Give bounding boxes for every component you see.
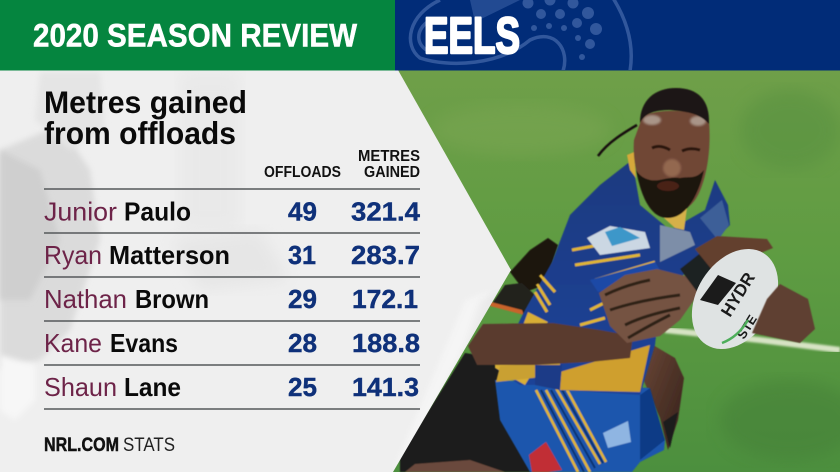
braid <box>598 125 637 156</box>
row: Ryan Matterson: Ryan <box>44 240 102 270</box>
tackling arm <box>468 323 633 365</box>
source: NRL.COM STATS: NRL.COM <box>44 435 119 456</box>
tattooed arm <box>599 269 699 343</box>
row: Junior Paulo <box>44 196 421 226</box>
heading: metres gained from offloads: Metres gained <box>44 84 247 120</box>
header: green title bar <box>0 0 396 70</box>
jersey light shoulder <box>700 200 729 240</box>
panel: stats background <box>0 70 511 472</box>
row: Kane Evans: Kane <box>44 328 102 358</box>
row: Nathan Brown: 172.1 <box>352 286 418 314</box>
photo: rugby league ball: HYDR <box>717 269 759 320</box>
row: Kane Evans <box>44 328 420 358</box>
row: Shaun Lane: 141.3 <box>352 374 419 402</box>
row: Ryan Matterson: 31 <box>288 242 316 270</box>
row: Ryan Matterson: Matterson <box>109 240 230 270</box>
photo: grass field background <box>380 70 840 472</box>
tackler body <box>400 353 532 472</box>
table column headers: GAINED <box>364 164 420 181</box>
jersey yellow stripes <box>535 243 655 325</box>
heading: metres gained from offloads: from offloads <box>44 115 236 151</box>
collar <box>627 152 636 178</box>
row: Shaun Lane: Shaun <box>44 372 117 402</box>
row: Nathan Brown: 29 <box>288 286 317 314</box>
hair <box>640 88 709 124</box>
row: Kane Evans: 188.8 <box>352 330 420 358</box>
row: Kane Evans: 28 <box>288 330 317 358</box>
row: Junior Paulo: Junior <box>44 196 117 226</box>
table column headers: METRES <box>358 148 420 165</box>
row: Kane Evans: Evans <box>110 328 178 358</box>
shorts <box>495 380 665 472</box>
row: Nathan Brown: Nathan <box>44 284 127 314</box>
row: Shaun Lane <box>44 372 419 402</box>
team name: EELS <box>424 7 520 64</box>
wristband <box>680 251 717 293</box>
tackler headgear <box>490 283 535 315</box>
tackler hair <box>510 238 558 292</box>
photo: player left hand <box>752 284 815 343</box>
source: NRL.COM STATS: STATS <box>123 435 175 456</box>
title: 2020 SEASON REVIEW <box>33 18 358 54</box>
table column headers: OFFLOADS <box>264 164 341 181</box>
tackler hand and forearm <box>643 345 684 450</box>
ghost player photo <box>0 72 510 470</box>
head and face <box>634 111 710 218</box>
photo: rugby league ball: STE <box>734 312 760 342</box>
heading: metres gained from offloads <box>44 84 247 151</box>
row: Ryan Matterson <box>44 240 420 270</box>
row: Nathan Brown: Brown <box>135 284 209 314</box>
row: Junior Paulo: Paulo <box>124 196 191 226</box>
icon: eel logo watermark <box>410 0 631 71</box>
row: Junior Paulo: 49 <box>288 198 317 226</box>
tackler lower skin <box>405 460 505 472</box>
photo: rugby league ball <box>674 233 796 365</box>
source: NRL.COM STATS <box>44 435 175 456</box>
row: Junior Paulo: 321.4 <box>351 198 421 226</box>
row: Nathan Brown <box>44 284 418 314</box>
row: Shaun Lane: 25 <box>288 374 317 402</box>
header: blue team bar <box>395 0 840 71</box>
sleeve <box>590 262 660 292</box>
row: Ryan Matterson: 283.7 <box>351 242 420 270</box>
photo: Eels player <box>468 88 773 472</box>
photo: opposing tackler <box>400 238 684 472</box>
jersey <box>495 160 730 395</box>
hand on ball <box>695 236 773 276</box>
row: Shaun Lane: Lane <box>124 372 181 402</box>
table column headers <box>264 148 420 181</box>
